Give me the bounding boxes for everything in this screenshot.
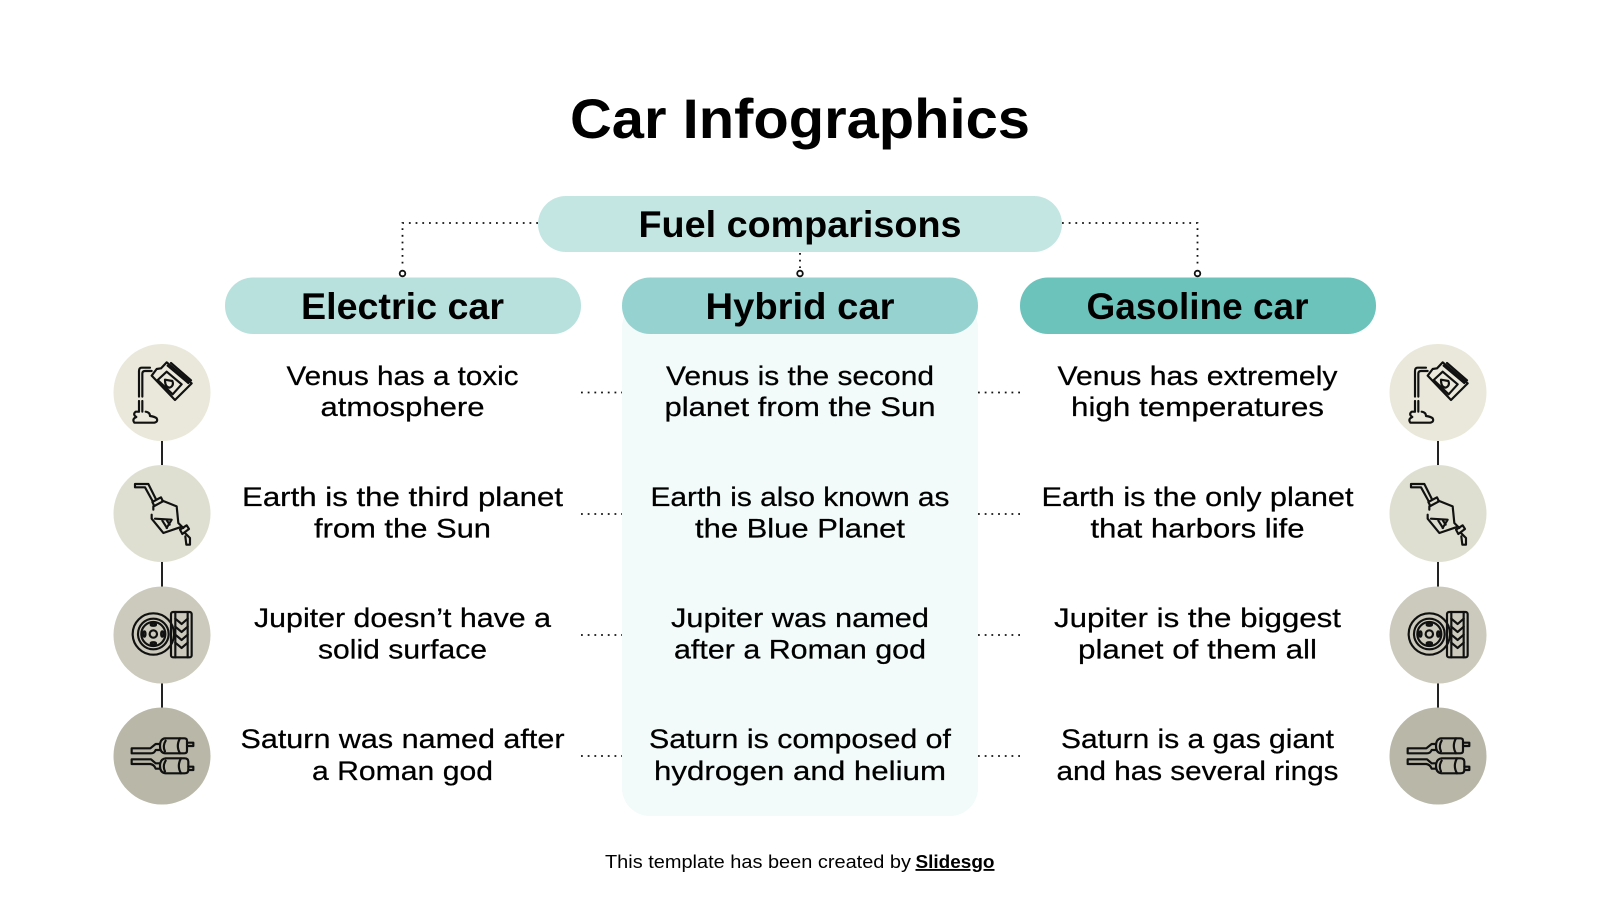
column: electric car text: Earth is the third planet	[242, 482, 564, 512]
column: gasoline car text: high temperatures	[1071, 392, 1324, 422]
column: hybrid car text: the Blue Planet	[695, 514, 906, 544]
heading pill: fuel comparisons	[538, 196, 1062, 252]
column: gasoline car text: Earth is the only planet	[1042, 482, 1354, 512]
column: gasoline car text	[1042, 361, 1354, 786]
heading pill: fuel comparisons: Fuel comparisons	[638, 204, 962, 245]
column: electric car text: atmosphere	[320, 392, 484, 422]
column: hybrid car text: Saturn is composed of	[649, 724, 952, 754]
column: electric car text: solid surface	[318, 634, 487, 664]
heading pill: gasoline car	[1020, 278, 1376, 334]
column: gasoline car text: Jupiter is the biggest	[1054, 603, 1342, 633]
row connectors	[581, 392, 1020, 756]
icon: fuel nozzle left	[114, 465, 210, 562]
footer credit: This template has been created by	[605, 851, 912, 872]
column: electric car text	[240, 361, 565, 786]
column: gasoline car text: planet of them all	[1078, 634, 1317, 664]
heading pill: hybrid car	[622, 278, 978, 334]
column: hybrid car text: Jupiter was named	[671, 603, 929, 633]
panel: hybrid column background	[622, 300, 978, 816]
icon: oil can right	[1390, 344, 1486, 441]
heading pill: electric car: Electric car	[301, 286, 504, 327]
column: hybrid car text: Earth is also known as	[650, 482, 950, 512]
icon: oil can left	[114, 344, 210, 441]
column: hybrid car text: Venus is the second	[666, 361, 934, 391]
icon: exhaust mufflers left	[114, 708, 210, 804]
column: hybrid car text	[649, 361, 952, 786]
column: gasoline car text: and has several rings	[1056, 756, 1338, 786]
column: gasoline car text: Saturn is a gas giant	[1061, 724, 1335, 754]
icon: fuel nozzle right	[1390, 465, 1486, 562]
icon: exhaust mufflers right	[1390, 708, 1486, 804]
column: hybrid car text: hydrogen and helium	[654, 756, 946, 786]
column: hybrid car text: after a Roman god	[674, 634, 926, 664]
vertical lines: right icon chain	[1437, 440, 1439, 760]
icon: wheel and tire right	[1390, 586, 1486, 684]
title: Car Infographics	[570, 87, 1030, 150]
connectors: top pill to column headings	[400, 223, 1200, 276]
heading pill: gasoline car: Gasoline car	[1086, 286, 1308, 327]
column: electric car text: Saturn was named after	[240, 724, 565, 754]
column: gasoline car text: that harbors life	[1090, 514, 1304, 544]
footer credit: Slidesgo	[916, 851, 994, 872]
column: electric car text: Jupiter doesn’t have a	[254, 603, 552, 633]
icon: wheel and tire left	[114, 586, 210, 684]
column: hybrid car text: planet from the Sun	[664, 392, 936, 422]
column: gasoline car text: Venus has extremely	[1058, 361, 1338, 391]
column: electric car text: Venus has a toxic	[286, 361, 518, 391]
heading pill: hybrid car: Hybrid car	[706, 286, 894, 327]
column: electric car text: a Roman god	[312, 756, 493, 786]
heading pill: electric car	[225, 278, 581, 334]
vertical lines: left icon chain	[161, 440, 163, 760]
column: electric car text: from the Sun	[314, 514, 491, 544]
